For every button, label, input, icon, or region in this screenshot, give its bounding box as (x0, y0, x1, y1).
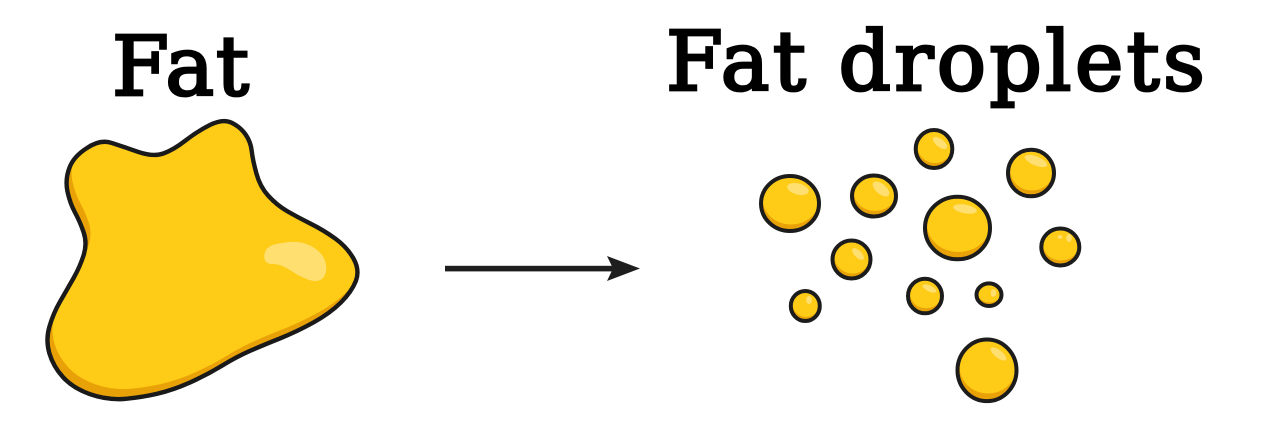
droplet 5 (925, 197, 990, 259)
droplet 10 (791, 291, 820, 321)
droplet 3 (916, 130, 952, 168)
droplet 11 (958, 340, 1016, 401)
droplet 9 (976, 283, 1002, 306)
droplet 7 (832, 240, 870, 278)
droplet 1 (761, 176, 819, 231)
arrow (445, 256, 640, 281)
icon: large fat blob (47, 111, 362, 399)
droplet 2 (852, 175, 896, 216)
droplet 4 (1008, 150, 1054, 196)
icon: fat droplets cluster (761, 130, 1079, 401)
title: Fat: Fat (112, 20, 249, 115)
title: Fat droplets: Fat droplets (666, 15, 1205, 110)
droplet 8 (908, 279, 942, 313)
droplet 6 (1041, 228, 1079, 266)
